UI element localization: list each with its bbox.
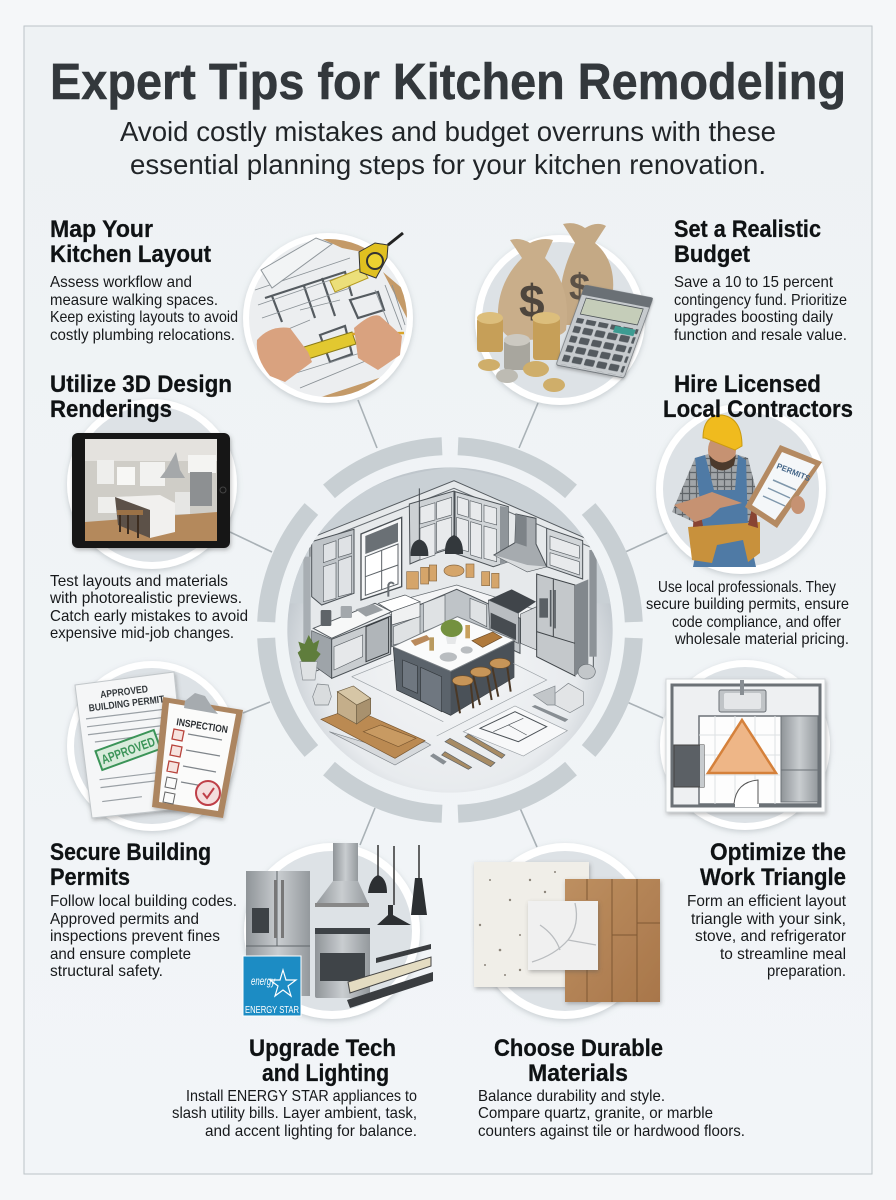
right upper cabinet (547, 528, 583, 579)
stove (674, 745, 704, 787)
tip: Optimize the Work Triangle: stove, and refrigerator (695, 928, 846, 945)
tip: Secure Building Permits: Follow local building codes. (50, 893, 237, 910)
illustration: permit and inspection: APPROVED (100, 684, 149, 701)
tip: Upgrade Tech and Lighting: and Lighting (262, 1060, 389, 1087)
tip: Hire Licensed Local Contractors: Local Contractors (663, 396, 853, 423)
segmented ring around centre (266, 446, 634, 814)
head (708, 433, 736, 467)
illustration: money bags and calculator: $ (569, 267, 590, 309)
tip: Upgrade Tech and Lighting: Upgrade Tech (249, 1035, 396, 1062)
tip: Optimize the Work Triangle: triangle with your sink, (691, 911, 846, 928)
left money bag (498, 239, 567, 340)
stools (452, 658, 511, 713)
illustration: permit and inspection: INSPECTION (176, 717, 229, 736)
illustration: plan your layout (243, 233, 415, 405)
tip: Optimize the Work Triangle: preparation. (767, 963, 846, 980)
tip: Set a Realistic Budget (674, 216, 847, 344)
tip: Map Your Kitchen Layout: costly plumbing relocations. (50, 327, 235, 344)
tip: Optimize the Work Triangle (687, 839, 847, 980)
title: Expert Tips for Kitchen Remodeling (50, 53, 846, 110)
tip: Map Your Kitchen Layout (50, 216, 238, 344)
subtitle: Avoid costly mistakes and budget overruns with these (120, 116, 776, 147)
small appliance (313, 684, 331, 705)
illustration: money bags and calculator: $ (519, 275, 545, 327)
permit sheet (75, 672, 188, 818)
illustration: permit and inspection: BUILDING PERMIT (88, 694, 165, 714)
overalls (693, 455, 756, 567)
tip: Hire Licensed Local Contractors (646, 371, 853, 648)
tip: Utilize 3D Design Renderings: Utilize 3D Design (50, 371, 232, 398)
tip: Optimize the Work Triangle: Optimize the (710, 839, 846, 866)
hood (333, 843, 358, 881)
subtitle: essential planning steps for your kitchen renovation. (130, 149, 766, 180)
floor outlines (352, 660, 547, 736)
floor plan sheet (463, 706, 567, 756)
subtitle (120, 116, 776, 180)
illustration: tablet with 3D rendering (67, 399, 237, 569)
tip: Secure Building Permits: Approved permits and (50, 911, 199, 928)
lumber and box (329, 732, 431, 765)
tip: Utilize 3D Design Renderings: with photorealistic previews. (49, 590, 242, 607)
right money bag (560, 223, 613, 325)
backsplash items (407, 564, 499, 589)
window (361, 517, 402, 600)
triangle (708, 720, 776, 773)
tip: Utilize 3D Design Renderings: Catch early mistakes to avoid (50, 608, 248, 625)
tip: Hire Licensed Local Contractors: wholesale material pricing. (674, 631, 849, 648)
island (393, 641, 514, 715)
tip: Utilize 3D Design Renderings: Test layouts and materials (50, 573, 228, 590)
tip: Set a Realistic Budget: upgrades boosting daily (674, 309, 833, 326)
illustration: work triangle floor plan (660, 660, 830, 830)
tip: Upgrade Tech and Lighting: slash utility bills. Layer ambient, task, (172, 1105, 417, 1122)
arm pointing (674, 492, 742, 522)
illustration: appliances and lighting: energy (251, 974, 276, 988)
illustration: appliances and lighting (243, 843, 433, 1019)
tip: Optimize the Work Triangle: Work Triangle (700, 864, 846, 891)
hard hat (703, 415, 742, 450)
fridge (537, 574, 575, 676)
tip: Utilize 3D Design Renderings (49, 371, 248, 642)
tip: Hire Licensed Local Contractors: code compliance, and offer (672, 614, 841, 631)
tip: Secure Building Permits: Secure Building (50, 839, 211, 866)
inspection clipboard (152, 697, 243, 818)
rolled plan (261, 238, 332, 288)
tip: Map Your Kitchen Layout: measure walking spaces. (50, 292, 218, 309)
energy star label (243, 956, 301, 1016)
hand (791, 496, 805, 514)
illustration: appliances and lighting: ENERGY STAR (245, 1005, 299, 1016)
tip: Map Your Kitchen Layout: Kitchen Layout (50, 241, 211, 268)
tip: Map Your Kitchen Layout: Map Your (50, 216, 153, 243)
sink (378, 595, 420, 612)
illustration: money bags and calculator (475, 223, 653, 405)
tip: Hire Licensed Local Contractors: Hire Licensed (674, 371, 821, 398)
sink (719, 690, 766, 712)
tip: Choose Durable Materials: counters against tile or hardwood floors. (478, 1123, 745, 1140)
quartz sample (474, 862, 589, 987)
tip: Secure Building Permits (50, 839, 237, 980)
tip: Map Your Kitchen Layout: Assess workflow and (50, 274, 192, 291)
calculator (556, 285, 653, 378)
tip: Secure Building Permits: inspections prevent fines (50, 928, 220, 945)
upper left cabinets (312, 529, 354, 605)
fridge (246, 871, 310, 996)
tip: Choose Durable Materials: Balance durability and style. (478, 1088, 665, 1105)
ruler and hands (288, 332, 356, 364)
pendant lamps (411, 488, 463, 556)
stamp: APPROVED (99, 734, 157, 767)
coin stacks (477, 318, 503, 352)
tip: Hire Licensed Local Contractors: Use local professionals. They (658, 579, 836, 596)
pendant lights (378, 845, 419, 905)
tip: Map Your Kitchen Layout: Keep existing layouts to avoid (50, 309, 238, 326)
tip: Set a Realistic Budget: function and resale value. (674, 327, 847, 344)
central isometric kitchen illustration (287, 467, 613, 793)
wood sample (565, 879, 660, 1002)
tools (442, 734, 505, 769)
walls (310, 481, 593, 673)
tip: Hire Licensed Local Contractors: secure building permits, ensure (646, 596, 849, 613)
tip: Upgrade Tech and Lighting: Install ENERGY STAR appliances to (186, 1088, 417, 1105)
tip: Utilize 3D Design Renderings: Renderings (50, 396, 172, 423)
tip: Optimize the Work Triangle: Form an efficient layout (687, 893, 847, 910)
tip: Utilize 3D Design Renderings: expensive mid-job changes. (50, 625, 234, 642)
tip: Secure Building Permits: Permits (50, 864, 130, 891)
range (488, 589, 536, 613)
tip: Upgrade Tech and Lighting: and accent lighting for balance. (205, 1123, 417, 1140)
shirt (672, 450, 756, 530)
tip: Choose Durable Materials: Choose Durable (494, 1035, 663, 1062)
refrigerator (781, 716, 818, 802)
tip: Secure Building Permits: and ensure complete (50, 946, 191, 963)
tip: Upgrade Tech and Lighting (172, 1035, 417, 1140)
tip: Choose Durable Materials (478, 1035, 745, 1140)
tip: Choose Durable Materials: Compare quartz, granite, or marble (478, 1105, 713, 1122)
connector lines (230, 400, 667, 847)
tip: Optimize the Work Triangle: to streamline meal (720, 946, 846, 963)
tip: Choose Durable Materials: Materials (528, 1060, 628, 1087)
tip: Set a Realistic Budget: Budget (674, 241, 750, 268)
clipboard (745, 445, 822, 528)
tip: Set a Realistic Budget: Save a 10 to 15 percent (674, 274, 834, 291)
corner upper cabinets (409, 491, 454, 564)
illustration: contractor with clipboard (656, 404, 826, 574)
illustration: material samples (474, 843, 660, 1019)
hood (494, 514, 547, 572)
back counter (377, 585, 537, 618)
illustration: permit and inspection (67, 661, 243, 831)
left counter and base cabinets (313, 603, 392, 638)
floor plant (300, 662, 317, 680)
tape measure strip (330, 268, 368, 292)
tip: Secure Building Permits: structural safety. (50, 963, 163, 980)
light bars (376, 944, 431, 963)
range (315, 928, 370, 998)
tip: Set a Realistic Budget: contingency fund. Prioritize (674, 292, 847, 309)
tool belt (688, 522, 760, 563)
marble sample (528, 901, 598, 970)
illustration: contractor with clipboard: PERMITS (775, 462, 812, 483)
tip: Set a Realistic Budget: Set a Realistic (674, 216, 821, 243)
door (735, 802, 759, 807)
